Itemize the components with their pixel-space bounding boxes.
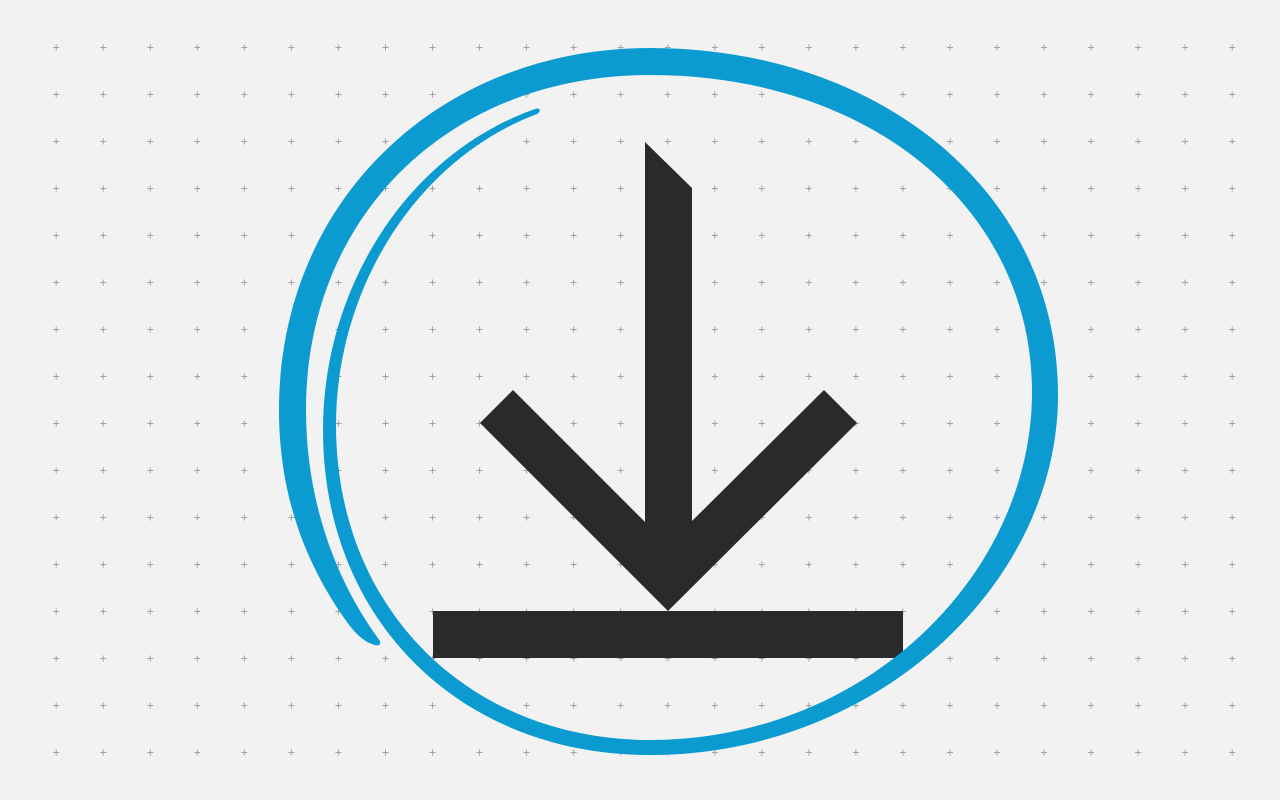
icon: download arrow [480, 142, 857, 611]
icon: download tray bar [433, 611, 903, 658]
icon: hand-drawn blue circle [279, 48, 1058, 755]
